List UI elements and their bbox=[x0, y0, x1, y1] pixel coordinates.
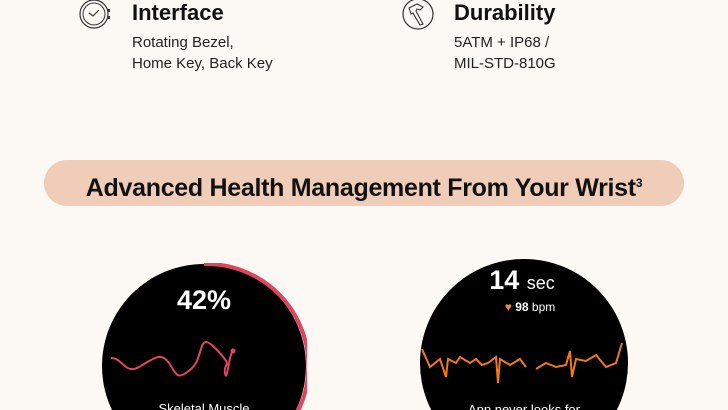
block: interface: Interface bbox=[132, 0, 224, 25]
watch: ECG bbox=[420, 259, 628, 410]
heading pill bbox=[44, 160, 684, 206]
block: interface: Home Key, Back Key bbox=[132, 55, 273, 72]
block: interface bbox=[132, 0, 273, 72]
watch: body composition bbox=[102, 263, 307, 410]
watch: body composition: 42% bbox=[177, 285, 231, 315]
block: durability bbox=[454, 0, 556, 72]
block: durability: MIL-STD-810G bbox=[454, 55, 556, 72]
icon: watch bbox=[79, 0, 110, 29]
watch: ECG: ♥ 98 bpm bbox=[505, 300, 555, 314]
icon: hammer bbox=[402, 0, 434, 30]
watch: ECG: 14 sec bbox=[489, 265, 555, 295]
block: durability: 5ATM + IP68 / bbox=[454, 34, 549, 51]
heading pill: Advanced Health Management From Your Wrist3 bbox=[86, 174, 642, 202]
block: interface: Rotating Bezel, bbox=[132, 34, 234, 51]
block: durability: Durability bbox=[454, 0, 555, 25]
